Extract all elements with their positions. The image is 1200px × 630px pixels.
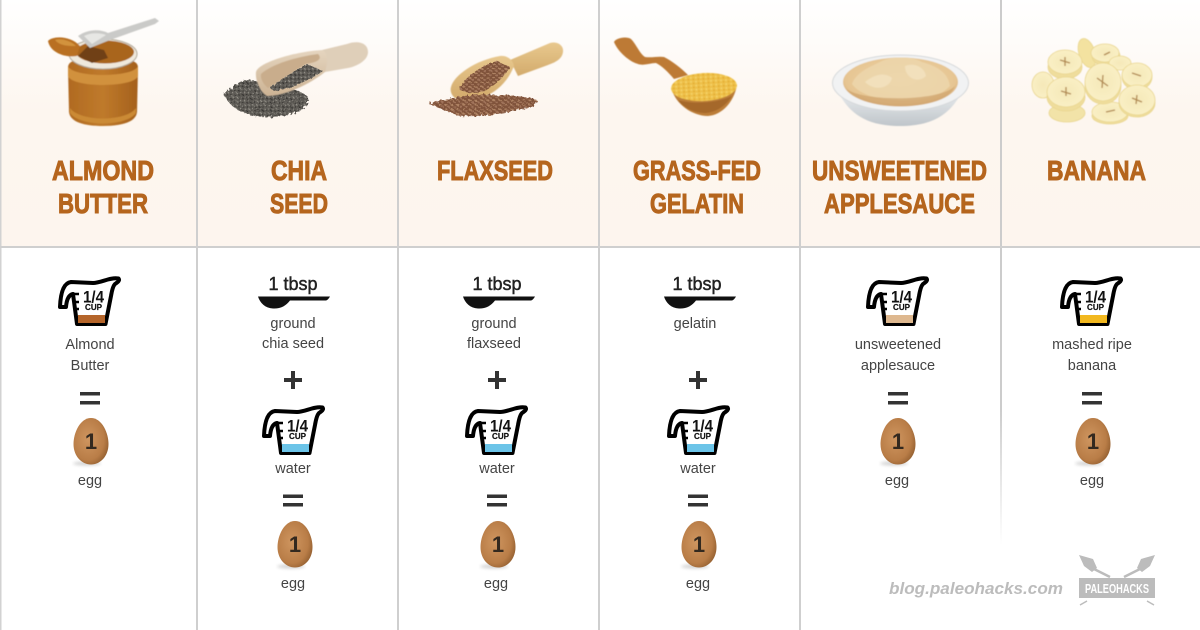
equals sign [487,494,507,506]
equals sign [1082,392,1102,404]
icon: quarter cup banana: 1/4 [1085,288,1106,306]
image: banana slices [1032,36,1155,124]
label: water: water [679,461,716,477]
label: water: water [478,461,515,477]
icon: egg [681,521,716,568]
label: egg: egg [281,576,305,592]
column: chia seed [224,42,368,592]
icon: egg [480,521,516,568]
heading: grass-fed gelatin: GRASS-FED [633,155,761,186]
icon: egg: 1 [289,532,301,557]
icon: tablespoon: 1 tbsp [472,274,522,294]
icon: quarter cup water: CUP [492,431,509,441]
icon: quarter cup water: CUP [694,431,711,441]
label: ground chia seed: ground [270,316,316,332]
label: egg: egg [484,576,508,592]
label: ground flaxseed: flaxseed [467,336,521,352]
heading: chia seed: CHIA [271,155,327,186]
heading: chia seed [270,155,328,219]
icon: quarter cup water: 1/4 [490,416,511,436]
label: egg: egg [78,473,102,489]
equals sign [688,494,708,506]
heading: grass-fed gelatin [633,155,761,219]
heading: unsweetened applesauce: UNSWEETENED [812,155,987,186]
icon: quarter cup banana: CUP [1087,302,1104,312]
heading: banana: BANANA [1047,155,1146,186]
image: flaxseed scoop [428,43,563,116]
icon: tablespoon [258,274,330,309]
heading: chia seed: SEED [270,188,328,219]
label: gelatin: gelatin [674,316,716,332]
heading: grass-fed gelatin: GELATIN [650,188,744,219]
label: mashed ripe banana: banana [1068,358,1117,374]
column: banana [1032,36,1155,489]
icon: egg: 1 [85,429,97,454]
icon: quarter cup banana [1062,278,1121,324]
column: unsweetened applesauce [812,55,987,489]
icon: quarter cup almond butter: 1/4 [83,288,104,306]
plus sign [488,371,506,389]
icon: egg [73,418,108,466]
heading: unsweetened applesauce: APPLESAUCE [824,188,975,219]
image: chia scoop [224,42,368,117]
icon: tablespoon: 1 tbsp [268,274,318,294]
header band [0,0,1200,247]
image: bowl of applesauce [832,55,968,126]
icon: quarter cup applesauce: CUP [893,302,910,312]
icon: egg [277,521,312,568]
column: grass-fed gelatin [614,38,761,592]
logo: paleohacks: PALEOHACKS [1085,581,1149,596]
label: egg: egg [686,576,710,592]
heading: almond butter: BUTTER [58,188,148,219]
icon: tablespoon [463,274,535,309]
icon: egg: 1 [892,429,904,454]
equals sign [80,392,100,404]
label: mashed ripe banana: mashed ripe [1052,337,1132,353]
equals sign [283,494,303,506]
image: almond butter jar [48,18,159,126]
icon: quarter cup water: CUP [289,431,306,441]
website url: blog.paleohacks.com [889,579,1063,598]
label: unsweetened applesauce: applesauce [861,358,935,374]
label: unsweetened applesauce: unsweetened [855,337,941,353]
icon: quarter cup water [264,407,323,453]
icon: egg: 1 [492,532,504,557]
column: flaxseed [428,43,563,592]
image: wooden spoon of gelatin [614,38,738,116]
label: water: water [274,461,311,477]
icon: egg: 1 [1087,429,1099,454]
label: ground chia seed: chia seed [262,336,324,352]
label: ground flaxseed: ground [471,316,517,332]
icon: egg [1075,418,1110,466]
plus sign [284,371,302,389]
label: egg: egg [885,473,909,489]
label: almond butter: Almond [65,337,115,353]
icon: quarter cup water: 1/4 [692,416,713,436]
heading: almond butter [52,155,154,219]
plus sign [689,371,707,389]
icon: quarter cup almond butter: CUP [85,302,102,312]
icon: quarter cup water: 1/4 [287,416,308,436]
icon: quarter cup almond butter [60,278,119,324]
logo: paleohacks [1079,555,1155,605]
icon: tablespoon [664,274,736,309]
icon: egg: 1 [693,532,705,557]
column: almond butter [48,18,159,489]
icon: tablespoon: 1 tbsp [672,274,722,294]
icon: quarter cup water [669,407,728,453]
icon: quarter cup applesauce: 1/4 [891,288,912,306]
icon: quarter cup applesauce [868,278,927,324]
icon: quarter cup water [467,407,526,453]
icon: egg [880,418,916,466]
label: egg: egg [1080,473,1104,489]
heading: almond butter: ALMOND [52,155,154,186]
heading: flaxseed: FLAXSEED [437,155,553,186]
equals sign [888,392,908,404]
heading: unsweetened applesauce [812,155,987,219]
label: almond butter: Butter [71,358,110,374]
